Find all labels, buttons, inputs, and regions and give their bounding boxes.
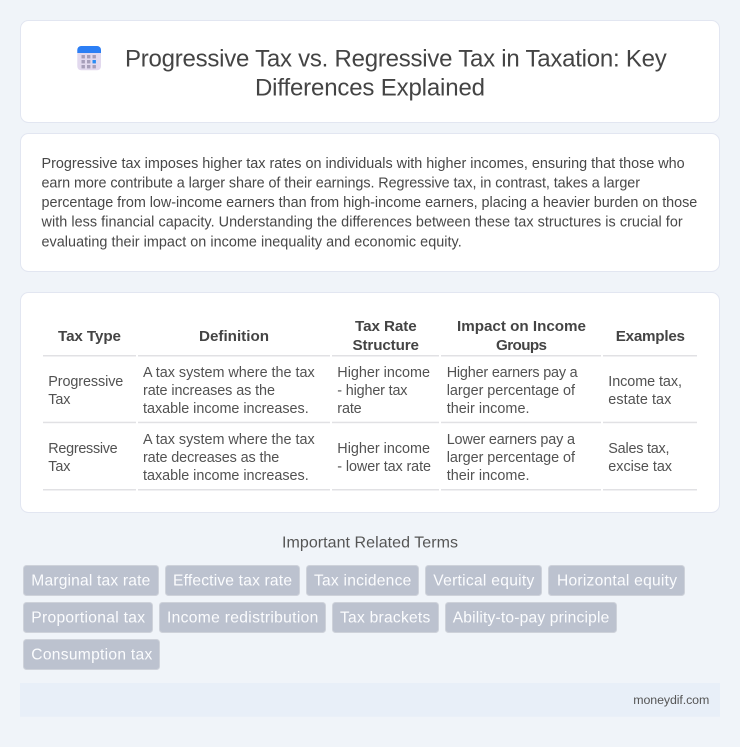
table row: regressive tax: Tax: [48, 459, 71, 475]
table row: progressive tax: Tax: [48, 392, 71, 408]
title: Progressive Tax vs. Regressive Tax in Taxation: Key: [125, 46, 667, 73]
related term tags: Consumption tax: [31, 647, 153, 664]
table row: regressive tax: Sales tax,: [608, 441, 670, 457]
table row: regressive tax: taxable income increases.: [143, 468, 309, 484]
table row: regressive tax: excise tax: [608, 459, 673, 475]
table row: progressive tax: Higher earners pay a: [447, 365, 578, 381]
table row: regressive tax: larger percentage of: [447, 450, 576, 466]
panel: introduction text: evaluating their impact on income inequality and economic equity.: [42, 234, 462, 250]
table row: progressive tax: rate increases as the: [143, 383, 275, 399]
table row: regressive tax: Lower earners pay a: [447, 432, 575, 448]
related term tags: Marginal tax rate: [31, 573, 150, 590]
table row: progressive tax: [48, 365, 682, 417]
icon: calendar: [77, 46, 101, 70]
related term tags: Ability-to-pay principle: [453, 610, 609, 627]
heading: important related terms: Important Related Terms: [282, 534, 458, 552]
table header row: Groups: [496, 337, 547, 354]
panel: title card: [20, 20, 720, 122]
related term tags: Tax incidence: [314, 573, 411, 590]
table row: progressive tax: - higher tax: [337, 383, 408, 399]
related term tags: Vertical equity: [433, 573, 535, 590]
table row: regressive tax: - lower tax rate: [337, 459, 431, 475]
table row: progressive tax: Income tax,: [608, 374, 682, 390]
table header row: Tax Type: [58, 328, 121, 345]
table header row: Structure: [352, 337, 419, 354]
related term tags: Proportional tax: [31, 610, 145, 627]
footer bar: [20, 683, 720, 717]
table row: progressive tax: estate tax: [608, 392, 672, 408]
table row: progressive tax: A tax system where the tax: [143, 365, 315, 381]
related term tags: Income redistribution: [167, 610, 318, 627]
table header row: Impact on Income: [457, 318, 586, 335]
footer bar: moneydif.com: [633, 693, 709, 707]
table row: progressive tax: rate: [337, 401, 362, 417]
table row: progressive tax: their income.: [447, 401, 530, 417]
table row: regressive tax: Regressive: [48, 441, 118, 457]
table header row: Tax Rate: [355, 318, 417, 335]
table header row: [58, 318, 685, 354]
table row: regressive tax: Higher income: [337, 441, 430, 457]
table row: progressive tax: larger percentage of: [447, 383, 576, 399]
table row: regressive tax: A tax system where the tax: [143, 432, 315, 448]
table row: progressive tax: Progressive: [48, 374, 123, 390]
related term tags: Tax brackets: [340, 610, 431, 627]
title: Differences Explained: [255, 75, 485, 102]
table header row: Definition: [199, 328, 269, 345]
panel: introduction text: with less financial capacity. Understanding the differences between these tax structures is crucial for: [40, 215, 683, 231]
table row: regressive tax: [48, 432, 673, 484]
table row: progressive tax: taxable income increases.: [143, 401, 309, 417]
related term tags: Horizontal equity: [557, 573, 677, 590]
panel: introduction text: [20, 134, 720, 272]
related term tags: Effective tax rate: [173, 573, 292, 590]
table row: regressive tax: rate decreases as the: [143, 450, 279, 466]
panel: comparison table: [20, 292, 720, 512]
related term tags: [24, 566, 684, 670]
table header row: Examples: [616, 328, 685, 345]
table row: regressive tax: their income.: [447, 468, 530, 484]
title: [125, 46, 667, 102]
panel: introduction text: earn more contribute a larger share of their earnings. Regressive tax, in contrast, takes a larger: [42, 176, 640, 192]
table row: progressive tax: Higher income: [337, 365, 430, 381]
panel: introduction text: percentage from low-income earners than from high-income earners, placing a heavier burden on those: [42, 195, 697, 211]
panel: introduction text: Progressive tax imposes higher tax rates on individuals with higher incomes, ensuring that those who: [42, 156, 685, 172]
